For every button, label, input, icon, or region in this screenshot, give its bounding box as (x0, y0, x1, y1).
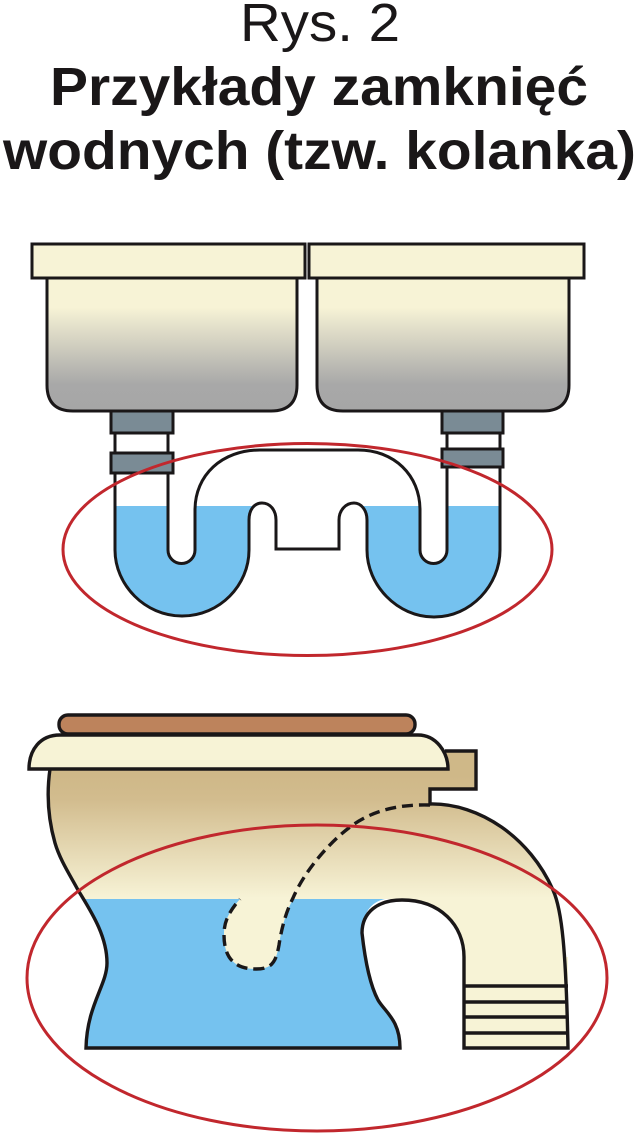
right sink basin (317, 278, 569, 411)
outer body outline (48, 751, 568, 1048)
toilet cross-section (29, 715, 568, 1048)
red ellipse: sink trap highlight (63, 444, 552, 656)
outlet thread lines (464, 986, 568, 1033)
left upper collar (111, 411, 173, 433)
left sink basin (47, 278, 297, 411)
left lower collar (111, 453, 173, 473)
title: Przykłady zamknięć (50, 57, 588, 117)
right lower collar (442, 449, 503, 467)
outlet thread lower section (464, 957, 568, 1048)
toilet seat (59, 715, 415, 734)
title: wodnych (tzw. kolanka) (2, 121, 636, 181)
cream siphon passage (224, 899, 293, 969)
red ellipse: toilet trap highlight (27, 825, 607, 1131)
double sink with water trap (32, 244, 584, 617)
connecting pipe outlines (168, 433, 447, 564)
toilet rim (29, 735, 448, 769)
dashed siphon line (224, 805, 430, 969)
toilet body (48, 751, 568, 1048)
right upper collar (442, 411, 503, 433)
water in right trap (362, 506, 500, 617)
water in bowl (84, 899, 400, 1048)
left sink rim (32, 244, 305, 278)
right sink rim (309, 244, 584, 278)
water in left trap (115, 506, 252, 616)
title (2, 0, 636, 181)
